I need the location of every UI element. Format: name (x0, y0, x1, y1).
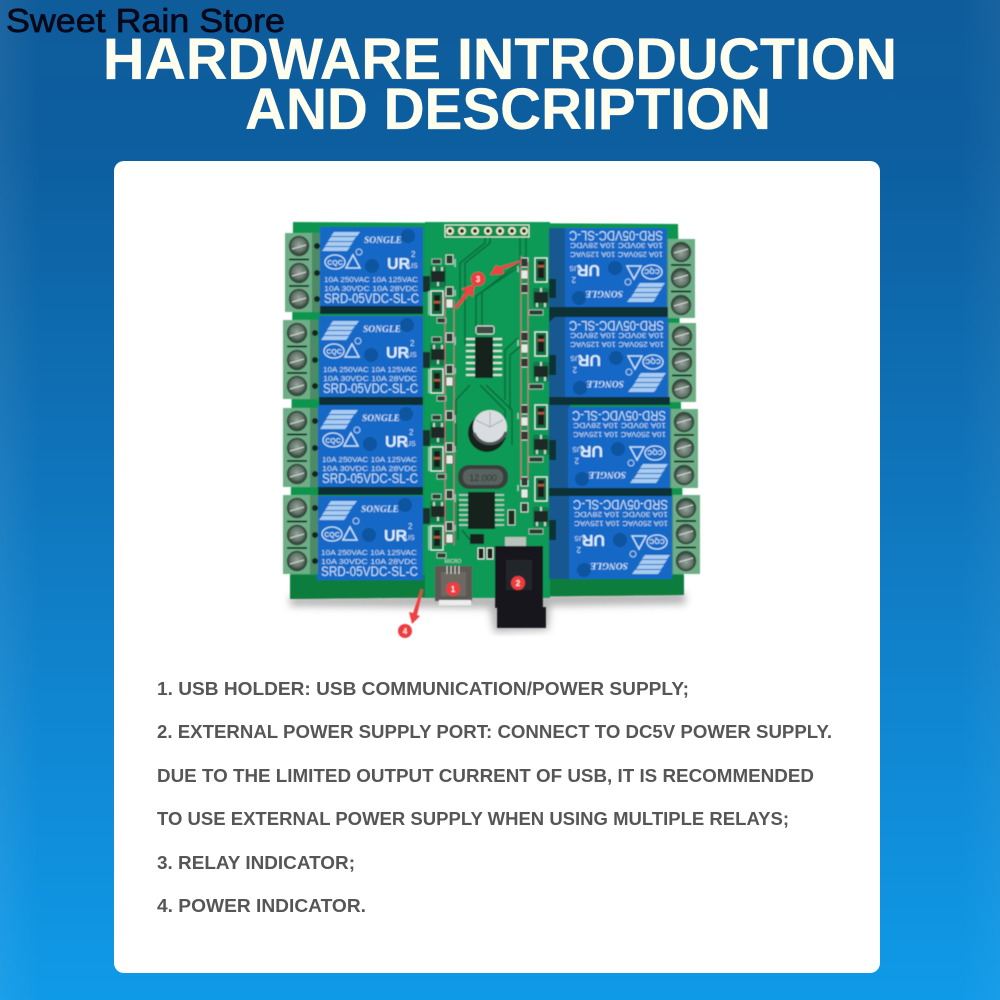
relay: left 4: SONGLE (361, 505, 399, 515)
relay: right 3: SRD-05VDC-SL-C (572, 408, 666, 423)
micro usb connector (435, 559, 472, 605)
relay: left 1: SONGLE (364, 236, 402, 246)
relay: right 1: SRD-05VDC-SL-C (569, 228, 663, 243)
crystal oscillator: 12.000 (469, 473, 497, 483)
control chip (466, 326, 502, 378)
relay: right 2 (565, 317, 668, 397)
relay: left 4 (317, 496, 423, 580)
relay: right 1 (565, 228, 667, 307)
relay: left 2 (319, 316, 423, 405)
left driver components (429, 255, 455, 558)
callout 1 (446, 582, 460, 596)
relay: left 4: UR (384, 528, 408, 545)
callout 3: 3 (476, 275, 481, 284)
relay: left 2: UR (386, 345, 410, 362)
relay: left 4: SRD-05VDC-SL-C (321, 564, 418, 579)
relay: left 2: 10A 30VDC 10A 28VDC (323, 374, 418, 383)
title: HARDWARE INTRODUCTION (103, 27, 897, 92)
relay: left 1: UR (387, 256, 411, 273)
callout 2: 2 (516, 579, 521, 588)
item 3: 3. RELAY INDICATOR; (157, 853, 355, 873)
store watermark: Sweet Rain Store (6, 2, 285, 39)
relay: right 4: 10A 30VDC 10A 28VDC (573, 510, 668, 519)
relay: right 2: 10A 30VDC 10A 28VDC (569, 331, 664, 340)
relay: left 4: CQC (324, 532, 340, 539)
relay: right 3: 10A 250VAC 10A 125VAC (572, 430, 666, 439)
relay: left 1 (320, 227, 423, 314)
relay: left 3: 10A 250VAC 10A 125VAC (322, 455, 418, 464)
relay: right 2: SRD-05VDC-SL-C (569, 318, 664, 333)
arrow: relay indicator left (455, 284, 475, 309)
callout 2 (511, 576, 525, 590)
relay: right 3: US (572, 445, 582, 452)
board traces (456, 237, 526, 540)
relay: left 1: CQC (327, 260, 343, 267)
relay: left 2: CQC (326, 349, 342, 356)
title (103, 27, 897, 142)
relay: right 4: CQC (649, 537, 665, 544)
right relay side housings (549, 228, 571, 579)
relay: right 3: 2 (574, 456, 579, 465)
product photo: relay board (283, 222, 700, 638)
board shadow (290, 592, 686, 632)
relay: left 2: SONGLE (363, 325, 401, 335)
arrow: relay indicator right (490, 261, 521, 275)
usb interface chip (459, 492, 504, 529)
relay: right 3: CQC (647, 448, 663, 455)
relay: right 2: SONGLE (586, 378, 624, 388)
relay: right 4 (569, 496, 672, 579)
item 1: 1. USB HOLDER: USB COMMUNICATION/POWER SUPPLY; (157, 679, 689, 699)
pin header (445, 225, 529, 237)
callout 4 (398, 624, 412, 638)
arrow: power indicator (409, 589, 423, 624)
relay: left 3: SRD-05VDC-SL-C (322, 471, 418, 486)
relay: left 1: 10A 30VDC 10A 28VDC (324, 284, 419, 293)
relay: right 4: 10A 250VAC 10A 125VAC (573, 519, 668, 528)
relay: right 2: UR (577, 351, 601, 368)
relay: right 2: CQC (645, 357, 661, 364)
regulator parts (470, 510, 515, 559)
relay: right 2: 10A 250VAC 10A 125VAC (569, 340, 664, 349)
left terminal blocks (283, 233, 320, 574)
relay: left 2: SRD-05VDC-SL-C (323, 381, 418, 396)
item 4: 4. POWER INDICATOR. (157, 896, 366, 916)
relay: right 4: 2 (576, 545, 581, 554)
relay: right 1: 10A 30VDC 10A 28VDC (569, 241, 663, 250)
circuit board (290, 222, 684, 599)
relay: right 3: 10A 30VDC 10A 28VDC (572, 421, 666, 430)
relay: left 3: SONGLE (362, 414, 400, 424)
item 2 continued: TO USE EXTERNAL POWER SUPPLY WHEN USING MULTIPLE RELAYS; (157, 809, 789, 829)
relay: left 3: UR (385, 434, 409, 451)
relay: right 1: CQC (644, 267, 660, 274)
dc power jack (495, 537, 546, 628)
relay: right 1: 10A 250VAC 10A 125VAC (569, 250, 663, 259)
relay: left 4: 10A 30VDC 10A 28VDC (321, 557, 418, 566)
relay: left 3: US (406, 441, 416, 448)
relay: right 4: US (574, 534, 584, 541)
relay: left 2: US (407, 352, 417, 359)
relay: left 4: 2 (408, 522, 413, 531)
indicator traces (445, 256, 528, 545)
relay: left 3: 10A 30VDC 10A 28VDC (322, 464, 418, 473)
item 2: 2. EXTERNAL POWER SUPPLY PORT: CONNECT TO DC5V POWER SUPPLY. (157, 722, 832, 742)
relay: right 2: 2 (572, 365, 577, 374)
description text (157, 679, 832, 916)
relay: left 1: US (408, 263, 418, 270)
right relay gaps and notches (549, 279, 672, 540)
micro usb connector: MICRO (445, 559, 461, 565)
relay: right 4: SONGLE (590, 560, 628, 570)
relay: right 1: US (569, 264, 579, 271)
relay: left 3: CQC (325, 438, 341, 445)
callout 1: 1 (451, 585, 456, 594)
relay: right 3: SONGLE (588, 469, 626, 479)
right driver components (518, 258, 550, 534)
callout 4: 4 (403, 627, 408, 636)
relay: left 4: US (405, 535, 415, 542)
relay: right 1: 2 (571, 275, 576, 284)
relay: left 3: 2 (409, 428, 414, 437)
relay: right 1: UR (576, 261, 600, 278)
relay: right 3: UR (579, 442, 603, 459)
title: AND DESCRIPTION (245, 77, 771, 142)
callout 3 (471, 272, 485, 286)
electrolytic capacitor (468, 410, 507, 452)
relay: left 1: SRD-05VDC-SL-C (324, 291, 419, 306)
relay: left 2: 10A 250VAC 10A 125VAC (323, 365, 418, 374)
relay: left 2: 2 (410, 339, 415, 348)
relay: right 4: UR (581, 531, 605, 548)
panel: white card (114, 161, 880, 973)
relay: right 2: US (570, 354, 580, 361)
relay: left 3 (318, 405, 423, 495)
relay: left 1: 10A 250VAC 10A 125VAC (324, 275, 419, 284)
item 2 continued: DUE TO THE LIMITED OUTPUT CURRENT OF USB, IT IS RECOMMENDED (157, 766, 814, 786)
relay: left 4: 10A 250VAC 10A 125VAC (321, 548, 418, 557)
right terminal blocks (660, 239, 700, 574)
relay: right 3 (568, 407, 670, 488)
left relay side notches (423, 276, 430, 524)
relay: right 4: SRD-05VDC-SL-C (573, 497, 668, 512)
crystal oscillator (458, 465, 508, 489)
relay: left 1: 2 (411, 250, 416, 259)
relay: right 1: SONGLE (585, 288, 623, 298)
